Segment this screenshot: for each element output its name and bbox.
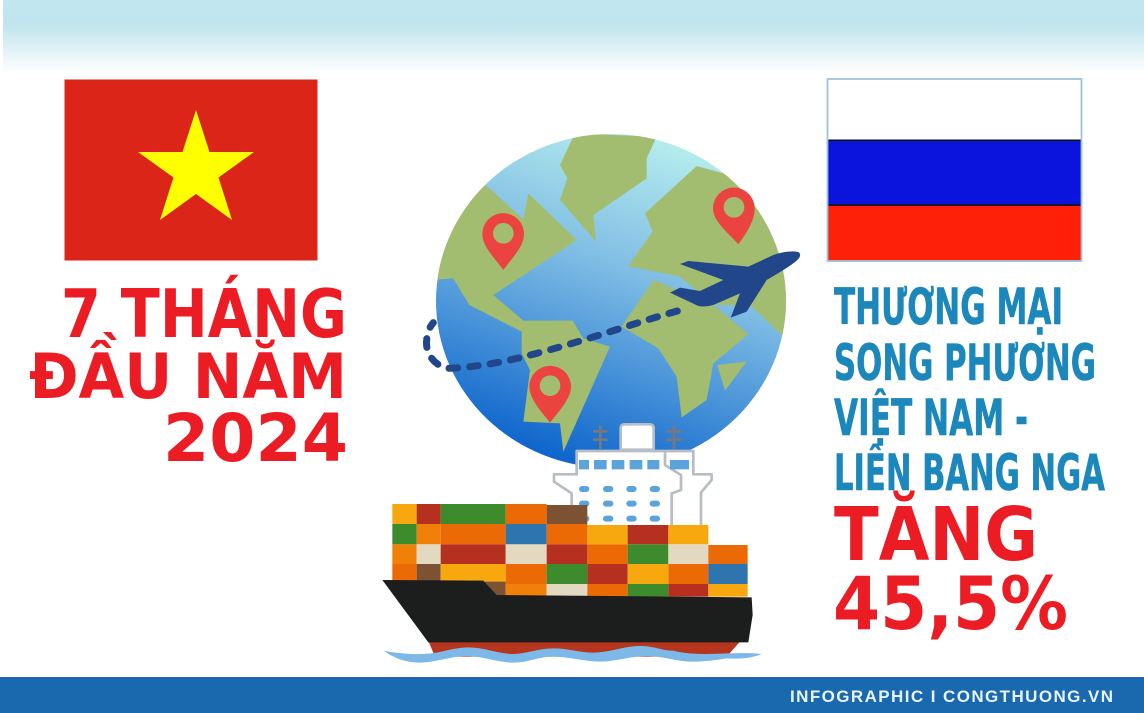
location pin: Asia: [713, 187, 755, 244]
heading: bilateral trade: VIỆT NAM -: [834, 388, 1028, 447]
footer bar: [0, 677, 1144, 713]
globe ocean: [436, 134, 786, 468]
water: [384, 646, 762, 663]
Vietnam flag: [64, 80, 318, 260]
container ship: [382, 424, 762, 663]
top gradient band: [3, 0, 1144, 73]
continents: [430, 133, 813, 452]
ship hull: [382, 580, 753, 642]
ship lower hull: [428, 641, 740, 657]
heading: period: 2024: [163, 400, 348, 477]
location pin: South America: [529, 366, 571, 423]
heading: period: [29, 274, 348, 477]
growth figure: TĂNG: [834, 490, 1038, 578]
globe with flight route: [426, 133, 813, 468]
ship windows: [579, 460, 689, 522]
location pin: Americas north: [482, 213, 524, 270]
growth figure: 45,5%: [833, 562, 1068, 647]
icon: airplane: [670, 251, 800, 318]
ship bridge: [554, 424, 712, 527]
heading: period: ĐẦU NĂM: [29, 332, 347, 413]
flight path: [426, 311, 677, 368]
growth figure: [833, 490, 1068, 647]
footer credit: INFOGRAPHIC I CONGTHUONG.VN: [790, 687, 1113, 706]
ship masts: [593, 425, 682, 449]
heading: period: 7 THÁNG: [61, 274, 347, 353]
Russia flag: [828, 79, 1082, 261]
cargo containers: [392, 504, 748, 597]
heading: bilateral trade: [834, 278, 1105, 502]
